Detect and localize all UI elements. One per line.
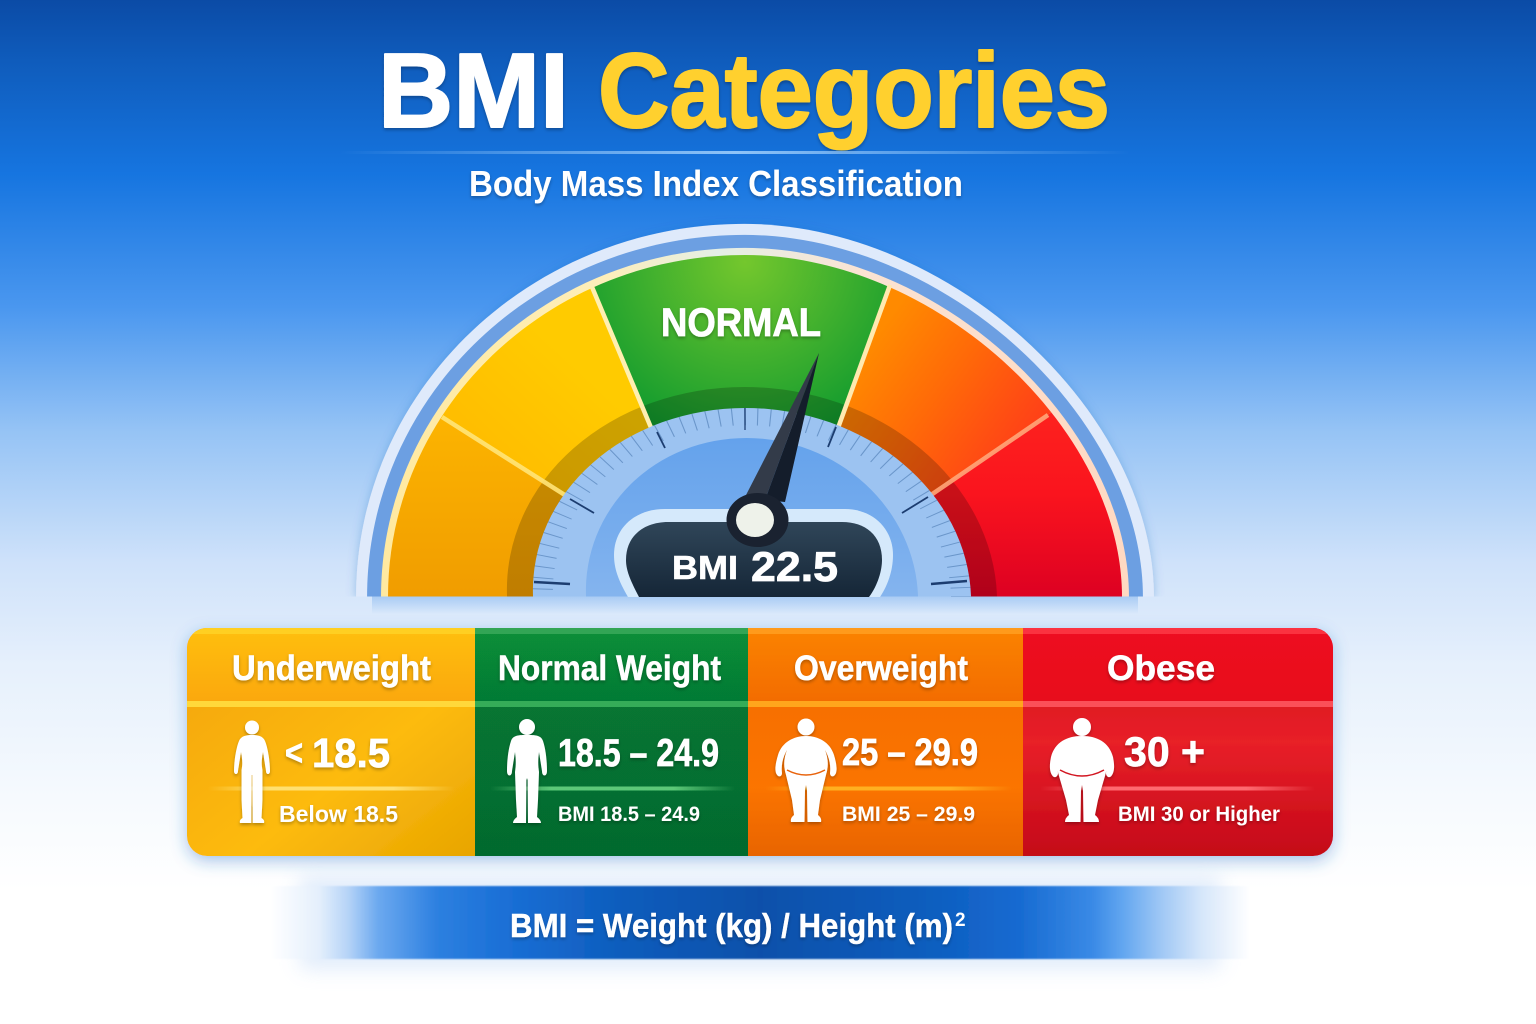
segment: underweight high (442, 288, 649, 494)
icon: underweight figure (234, 720, 270, 823)
gauge base shadow (372, 596, 1138, 614)
column: underweight (187, 628, 475, 856)
gauge (351, 224, 1159, 611)
segment: obese (932, 412, 1122, 596)
title: Categories (598, 32, 1110, 150)
category headings: Obese (1107, 649, 1215, 688)
segment: overweight (841, 288, 1052, 494)
segment: underweight low (388, 416, 564, 596)
readout value: BMI (672, 549, 738, 586)
segment dividers (442, 285, 1048, 497)
BMI readout plate (614, 509, 893, 597)
title: BMI (378, 32, 569, 150)
range values: 25 – 29.9 (842, 732, 978, 774)
range descriptions: BMI 30 or Higher (1118, 803, 1280, 826)
range values: < (285, 732, 303, 773)
gauge dark inner band (506, 387, 997, 596)
icon: obese figure (1050, 718, 1114, 822)
gauge inner disc (586, 438, 918, 596)
category headings: Underweight (232, 649, 431, 688)
column: overweight (748, 628, 1023, 856)
gauge tick ring (532, 408, 971, 596)
formula banner (270, 876, 1250, 969)
title underline (340, 151, 1130, 154)
column: normal weight (475, 628, 748, 856)
gauge outer rings (356, 224, 1154, 597)
category headings (232, 649, 1215, 688)
subtitle: Body Mass Index Classification (469, 163, 963, 204)
table (187, 628, 1333, 856)
icon: overweight figure (775, 718, 837, 822)
category headings: Normal Weight (498, 649, 721, 688)
segment: normal (594, 255, 888, 426)
label NORMAL: NORMAL (661, 301, 821, 345)
range descriptions: BMI 18.5 – 24.9 (558, 803, 700, 826)
range descriptions: BMI 25 – 29.9 (842, 803, 975, 826)
range values: 18.5 – 24.9 (558, 732, 719, 775)
major ticks (534, 408, 967, 584)
title (378, 32, 1110, 150)
formula banner: 2 (955, 910, 966, 931)
row dividers (208, 786, 1315, 790)
BMI readout plate: 22.5 (751, 543, 838, 590)
range values: 30 + (1124, 728, 1205, 775)
range descriptions: Below 18.5 (279, 801, 398, 827)
column: obese (1023, 628, 1333, 856)
range descriptions (279, 801, 1280, 827)
formula text: BMI = Weight (kg) / Height (m) (510, 907, 953, 944)
gauge colour segments (388, 255, 1122, 596)
needle (726, 353, 819, 547)
range values: 18.5 (312, 730, 390, 776)
icon: normal figure (507, 719, 547, 823)
range values (285, 728, 1205, 776)
category headings: Overweight (794, 649, 968, 688)
